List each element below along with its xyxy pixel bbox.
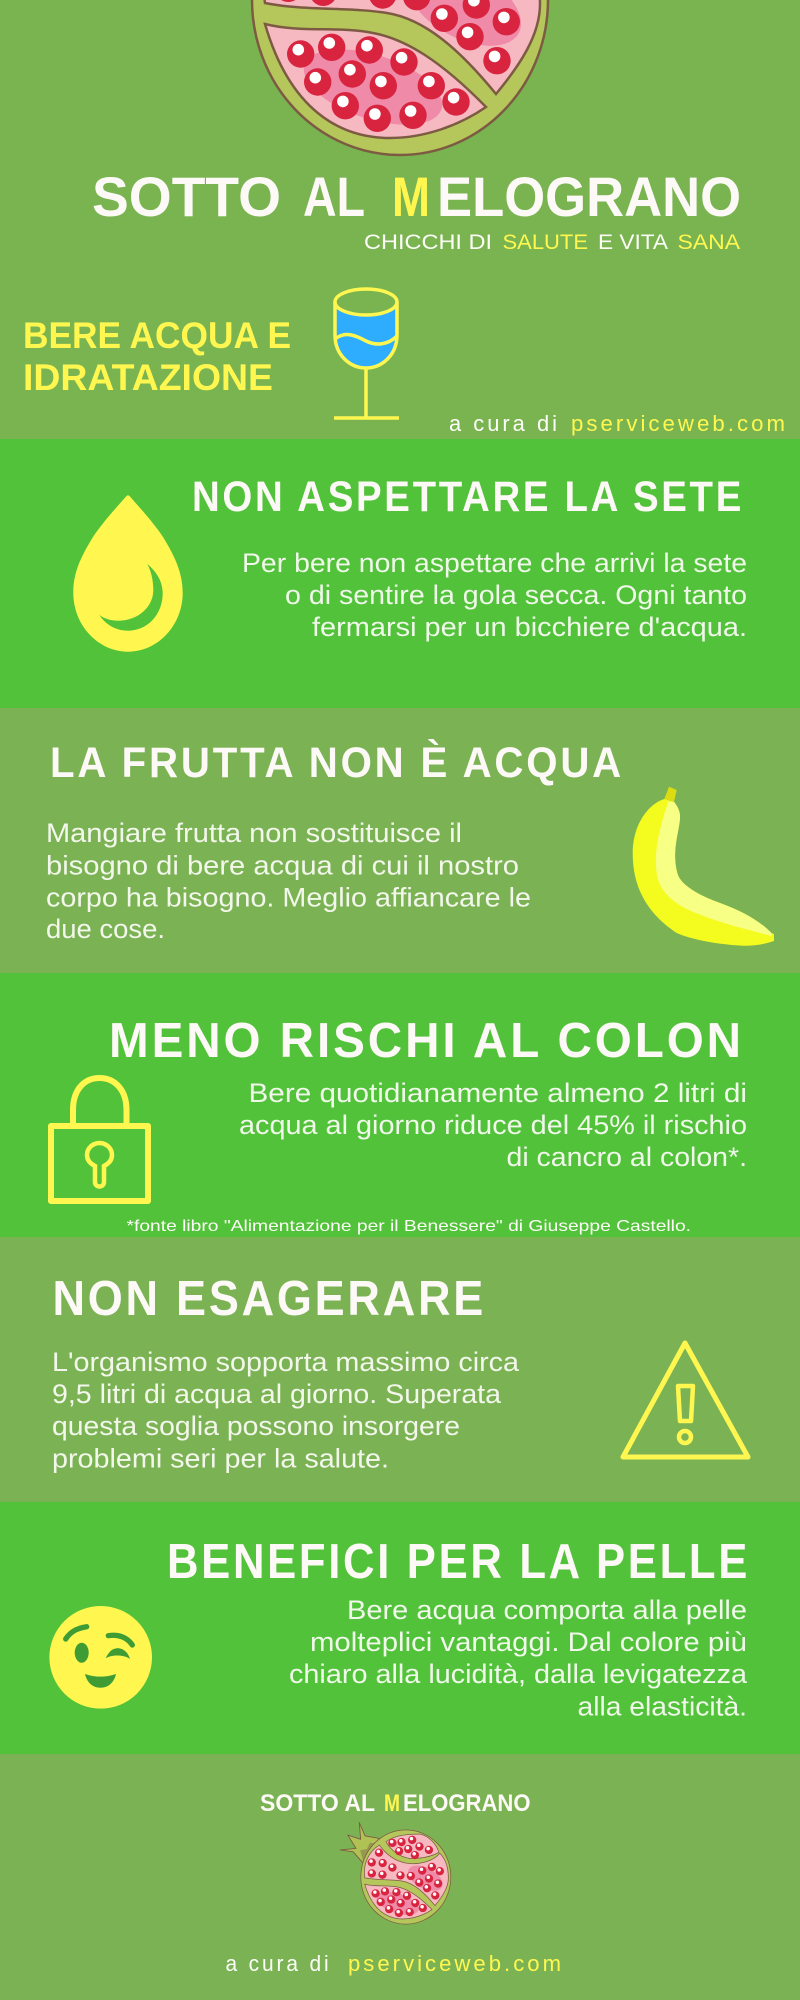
icon: water glass (334, 289, 399, 418)
icon: banana (633, 787, 774, 946)
subtitle: SALUTE (502, 231, 588, 254)
text block: Mangiare frutta non sostituisce il (46, 818, 462, 848)
topic heading: IDRATAZIONE (23, 357, 273, 398)
text block (52, 1347, 519, 1474)
topic heading: BERE ACQUA E (23, 315, 291, 356)
panel: meno rischi al colon (0, 973, 800, 1237)
footer title: M (384, 1790, 400, 1817)
panel: la frutta non e acqua (0, 708, 800, 973)
text block: questa soglia possono insorgere (52, 1411, 460, 1441)
subtitle (364, 231, 740, 254)
panel: non esagerare (0, 1237, 800, 1502)
text block: o di sentire la gola secca. Ogni tanto (285, 580, 747, 610)
icon: small pomegranate (340, 1823, 451, 1924)
heading: LA FRUTTA NON È ACQUA (50, 739, 624, 787)
topic heading (23, 315, 291, 398)
icon: large pomegranate (184, 0, 548, 155)
text block: molteplici vantaggi. Dal colore più (310, 1627, 747, 1657)
panel: footer (0, 1754, 800, 2000)
subtitle: CHICCHI DI (364, 231, 492, 254)
text block: chiaro alla lucidità, dalla levigatezza (289, 1659, 747, 1689)
text block: alla elasticità. (578, 1692, 747, 1722)
credit: pserviceweb.com (571, 411, 788, 436)
text block (239, 1078, 747, 1172)
panel: benefici per la pelle (0, 1502, 800, 1754)
footer title: ELOGRANO (403, 1790, 530, 1817)
title: M (392, 165, 430, 228)
credit (449, 411, 788, 436)
title: ELOGRANO (437, 165, 741, 228)
title: SOTTO (92, 165, 281, 228)
heading: NON ESAGERARE (52, 1272, 486, 1326)
footer title: SOTTO AL (260, 1790, 375, 1817)
footer credit (226, 1951, 564, 1976)
title: AL (303, 165, 365, 228)
text block: problemi seri per la salute. (52, 1444, 389, 1474)
footer credit: pserviceweb.com (348, 1951, 564, 1976)
text block (289, 1595, 747, 1722)
text block: di cancro al colon*. (506, 1142, 747, 1172)
heading: MENO RISCHI AL COLON (109, 1014, 744, 1068)
credit: a cura di (449, 411, 560, 436)
text block: L'organismo sopporta massimo circa (52, 1347, 519, 1377)
text block: due cose. (46, 914, 165, 944)
icon: padlock (51, 1078, 148, 1201)
subtitle: E VITA (598, 231, 668, 254)
text block: corpo ha bisogno. Meglio affiancare le (46, 882, 531, 912)
footnote: *fonte libro "Alimentazione per il Benessere" di Giuseppe Castello. (126, 1218, 691, 1235)
text block: fermarsi per un bicchiere d'acqua. (312, 612, 747, 642)
text block: bisogno di bere acqua di cui il nostro (46, 850, 519, 880)
text block: Bere quotidianamente almeno 2 litri di (248, 1078, 747, 1108)
text block: acqua al giorno riduce del 45% il rischio (239, 1110, 747, 1140)
title (92, 165, 741, 228)
panel: header (23, 0, 788, 436)
text block: 9,5 litri di acqua al giorno. Superata (52, 1379, 501, 1409)
footer credit: a cura di (226, 1951, 332, 1976)
text block (242, 548, 747, 642)
text block (46, 818, 531, 944)
icon: winking face (49, 1606, 152, 1709)
icon: water drop (73, 495, 183, 652)
icon: warning triangle (623, 1343, 748, 1457)
panel: non aspettare la sete (0, 439, 800, 708)
text block: Per bere non aspettare che arrivi la sete (242, 548, 747, 578)
heading: NON ASPETTARE LA SETE (192, 473, 744, 521)
text block: Bere acqua comporta alla pelle (347, 1595, 747, 1625)
footer title (260, 1790, 530, 1817)
subtitle: SANA (678, 231, 740, 254)
